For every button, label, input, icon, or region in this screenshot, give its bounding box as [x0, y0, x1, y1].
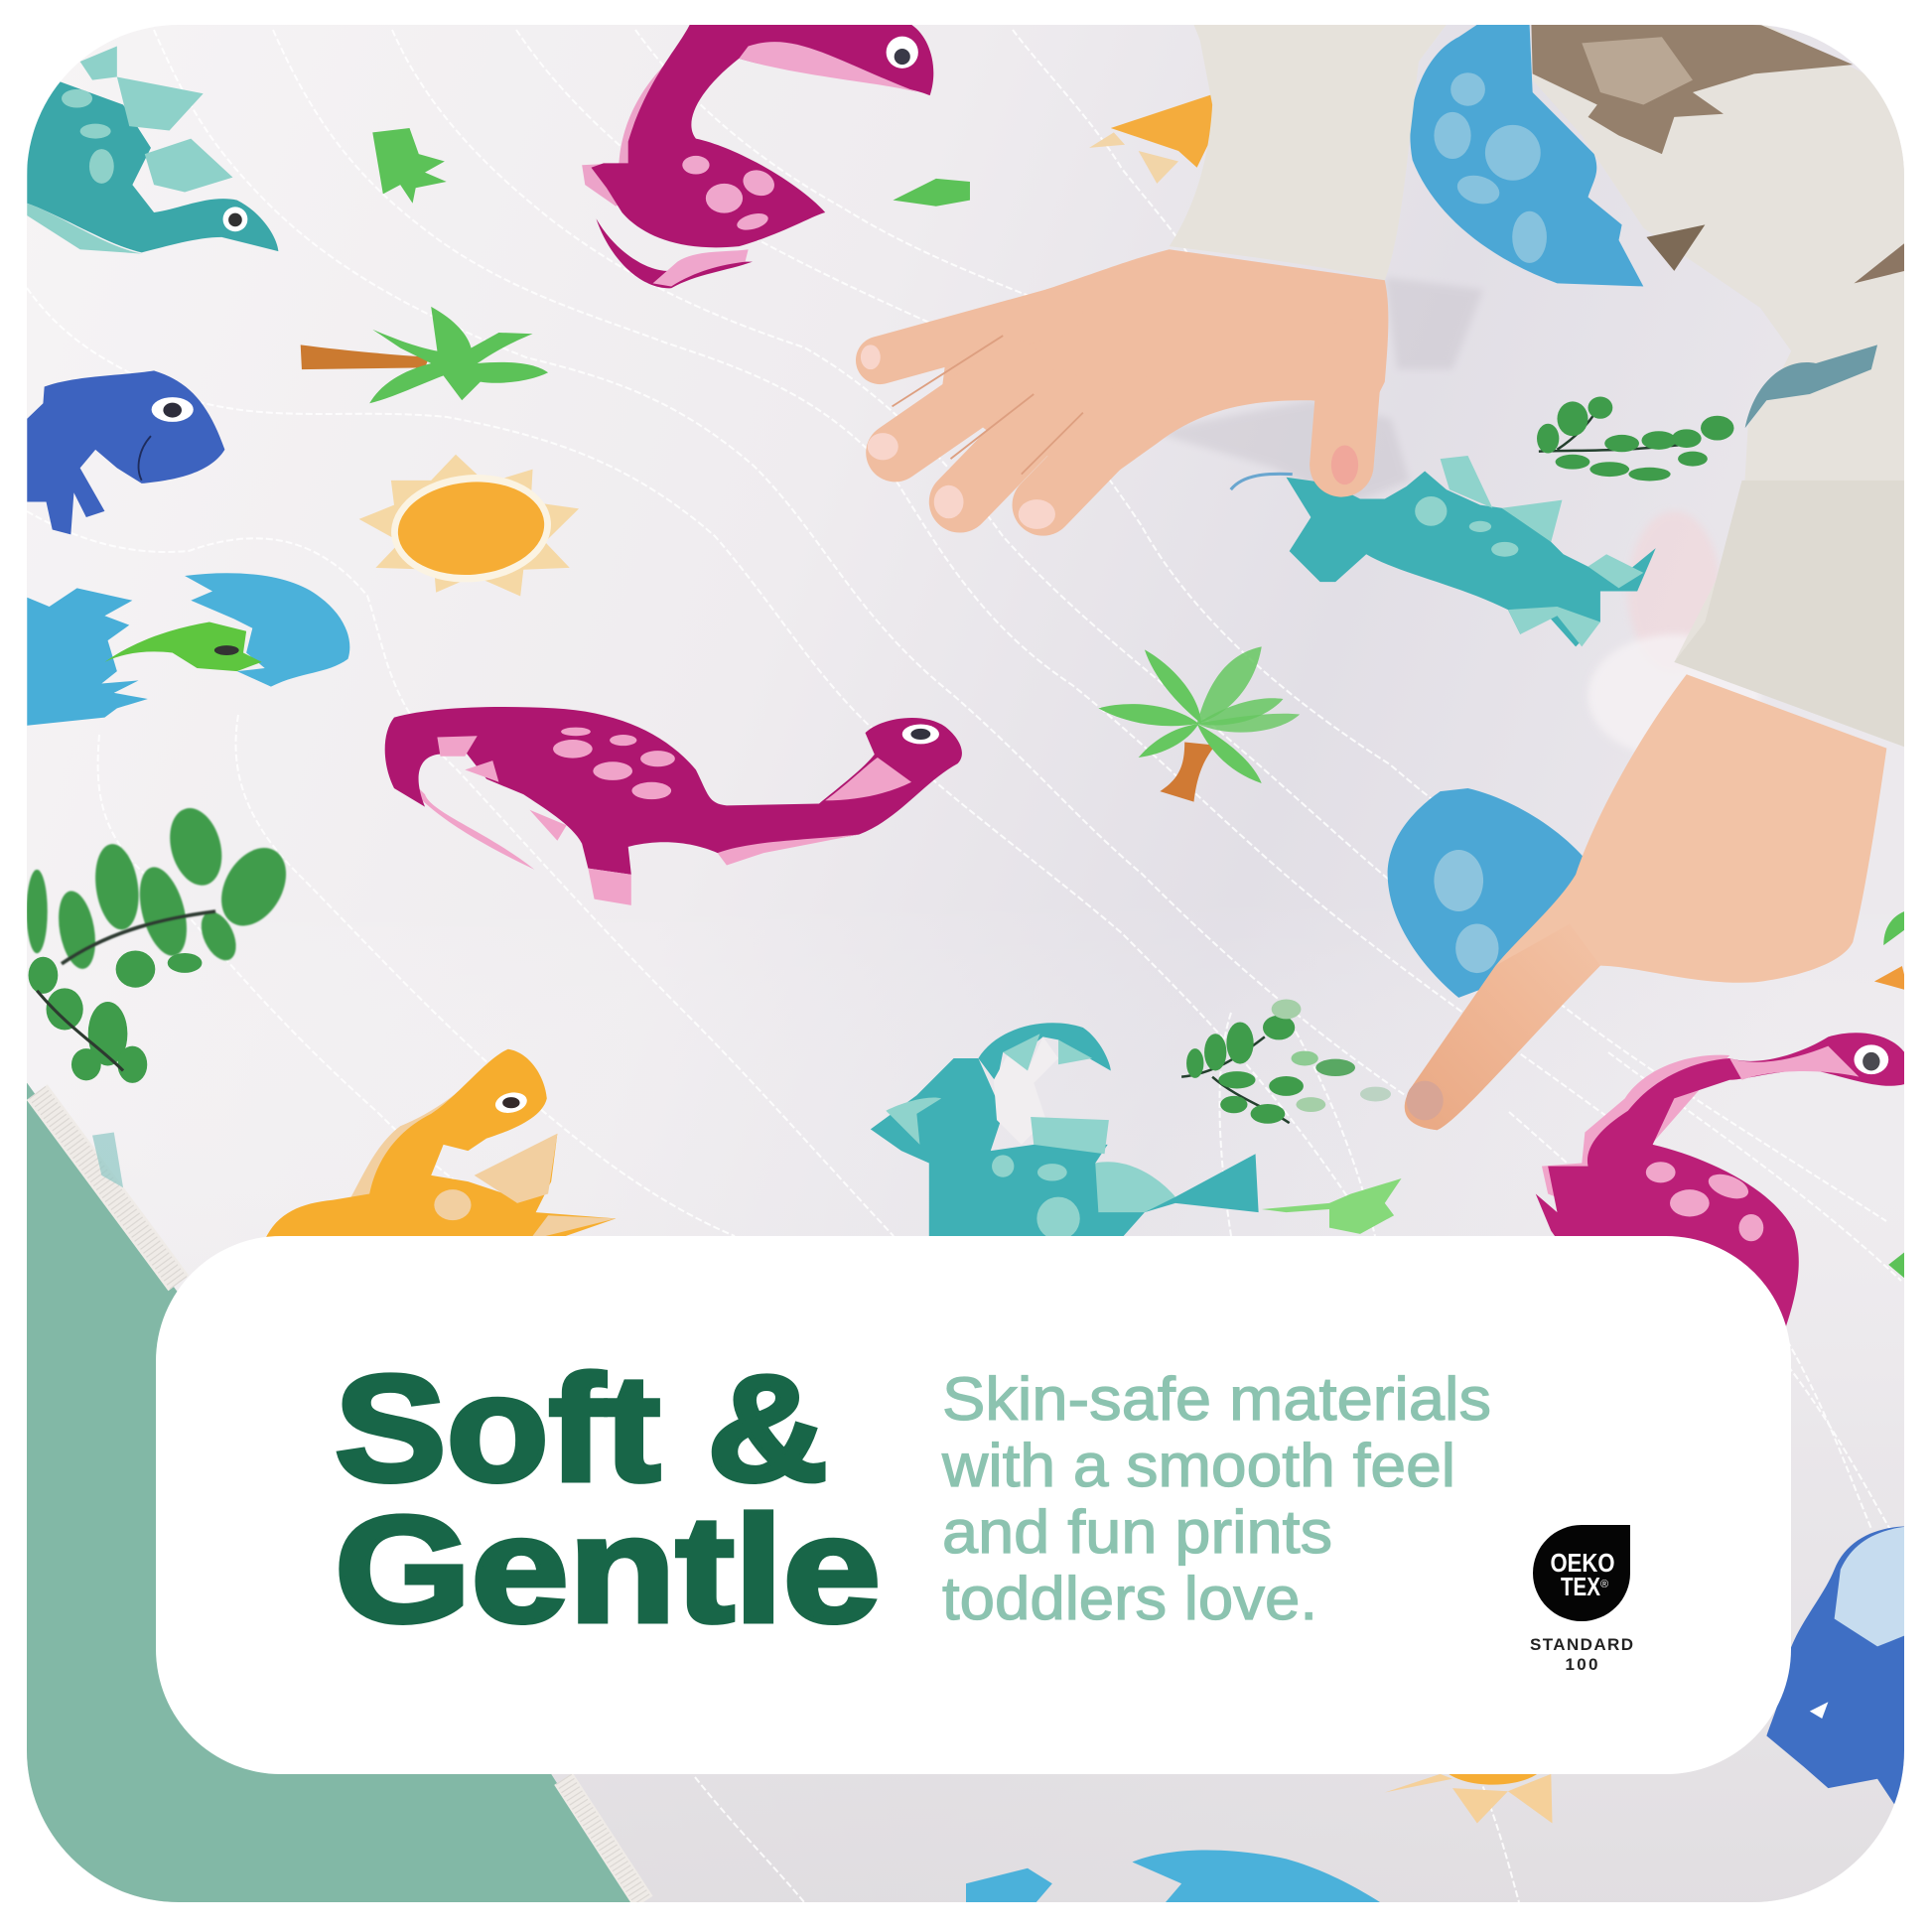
badge: OEKO-TEX Standard 100: STANDARD: [1530, 1635, 1633, 1654]
pink stain beside sleeve: [1628, 511, 1721, 671]
Q4: bottom-right fabric prints: [871, 966, 1908, 1905]
blue dinosaur fragments, bottom edge: [966, 1850, 1385, 1905]
heading: Soft & Gentle: [335, 1344, 881, 1654]
description text: toddlers love.: [942, 1565, 1317, 1632]
white text card: [156, 1236, 1791, 1774]
orange sun rays fragment: [1089, 92, 1218, 184]
magenta dinosaur, top centre: [582, 25, 933, 288]
teal dinosaur, lower centre: [871, 1023, 1259, 1240]
green sprout small: [893, 179, 970, 207]
Q3: bottom-left fabric prints: [29, 950, 616, 1240]
lower hand pointing: [1405, 674, 1886, 1130]
badge: OEKO-TEX Standard 100: OEKO: [1551, 1548, 1614, 1578]
sun: [359, 455, 579, 596]
orange dinosaur: [265, 1049, 616, 1240]
magenta dinosaur, centre: [385, 707, 962, 905]
green leaf, lower: [1262, 1178, 1402, 1234]
right edge print fragments: [1883, 911, 1904, 945]
palm tree lying sideways: [301, 307, 548, 403]
upper hand: [861, 249, 1388, 529]
green leaves continued: [29, 950, 202, 1083]
blue egg, lower: [1388, 788, 1588, 998]
soft shadows on fabric: [1151, 277, 1483, 505]
badge: OEKO-TEX Standard 100: ®: [1600, 1579, 1608, 1590]
green leafy sprig: [1537, 396, 1734, 481]
teal print fragment on hem: [92, 1132, 123, 1187]
green fragment, right edge: [1888, 1249, 1908, 1282]
blue dinosaur back, top: [1410, 25, 1643, 286]
teal dinosaur, top left: [27, 47, 278, 254]
teal dinosaur under hand: [1231, 456, 1656, 646]
green leafy plant, bottom left: [27, 802, 299, 972]
Q2: top-right fabric prints, sleeves and hands: [861, 25, 1908, 1130]
badge: OEKO-TEX Standard 100: TEX: [1561, 1572, 1601, 1601]
description text: with a smooth feel: [941, 1432, 1455, 1499]
sun fragment under card: [1385, 1769, 1553, 1823]
heading: Soft & Gentle: Gentle: [335, 1485, 881, 1654]
badge: OEKO-TEX Standard 100: [1530, 1525, 1633, 1674]
palm tree: [1098, 646, 1300, 802]
description text: Skin-safe materials: [942, 1365, 1491, 1433]
green sprout: [372, 128, 447, 204]
blue dinosaur, bottom right: [1766, 1526, 1908, 1807]
Q1: top-left fabric prints: [27, 25, 970, 972]
description text: [941, 1365, 1491, 1632]
magenta dinosaur, lower right: [1536, 1033, 1908, 1329]
orange fragment, right edge: [1874, 966, 1908, 991]
green backdrop surface: [0, 1083, 643, 1905]
blue dinosaur, left: [27, 370, 224, 534]
description text: and fun prints: [942, 1498, 1332, 1566]
badge: OEKO-TEX Standard 100: 100: [1565, 1655, 1598, 1674]
green leafy sprig, lower: [1181, 999, 1391, 1124]
sleeve and torso with dino print: [1531, 25, 1908, 749]
blue dinosaur and hatching egg, left: [27, 573, 349, 726]
heading: Soft & Gentle: Soft &: [335, 1344, 828, 1513]
upper cuff: [1170, 25, 1447, 280]
